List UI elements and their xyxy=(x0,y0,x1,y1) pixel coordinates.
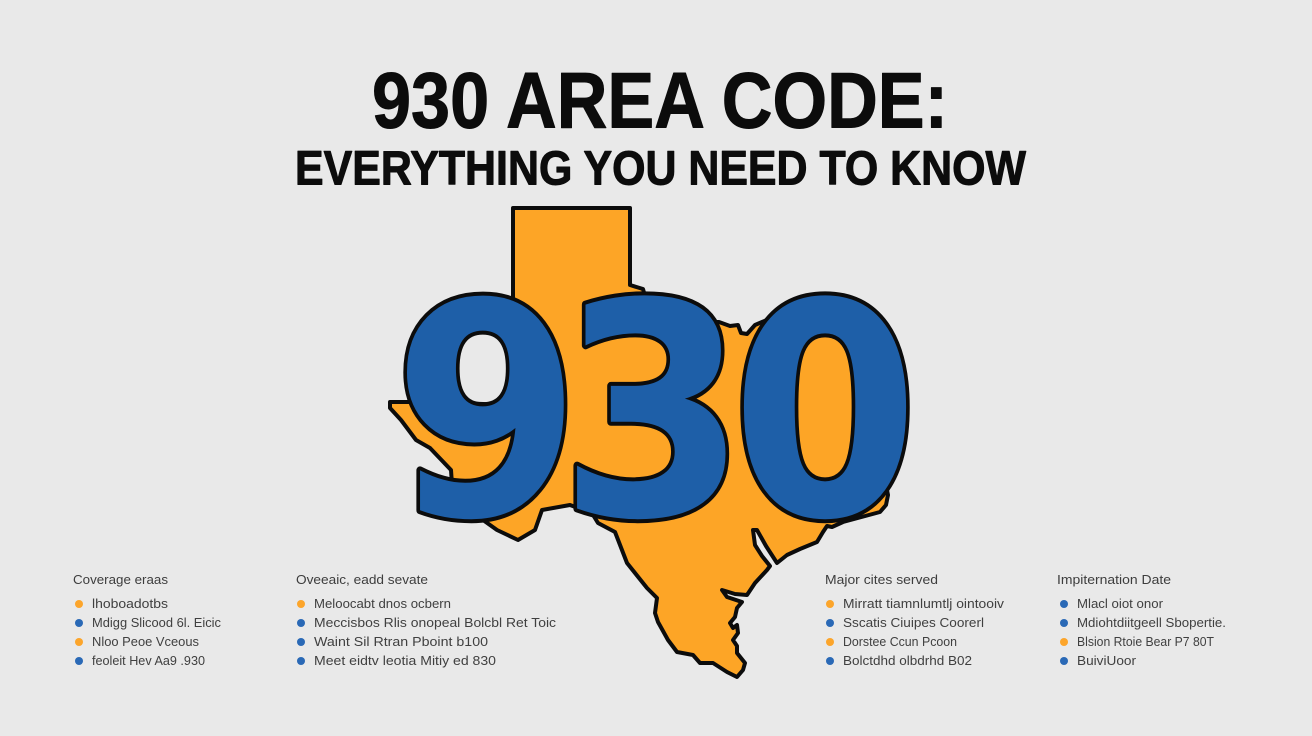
panel: coverage xyxy=(73,572,221,668)
list: overlay: Meccisbos Rlis onopeal Bolcbl Ret Toic xyxy=(314,616,556,630)
list: major cities: Mirratt tiamnlumtlj ointooiv xyxy=(843,597,1005,611)
large 930 numeral: 3 xyxy=(559,240,747,585)
list: implementation date xyxy=(1060,597,1226,668)
list: implementation date: Blsion Rtoie Bear P7 80T xyxy=(1077,635,1214,649)
large 930 numeral xyxy=(393,240,919,585)
list: overlay: Meloocabt dnos ocbern xyxy=(314,597,451,611)
list: major cities: Dorstee Ccun Pcoon xyxy=(843,635,957,649)
list: major cities: Sscatis Ciuipes Coorerl xyxy=(843,616,984,630)
panel: implementation date xyxy=(1057,572,1226,668)
list: overlay: Meet eidtv leotia Mitiy ed 830 xyxy=(314,654,496,668)
heading: implementation date: Impiternation Date xyxy=(1057,572,1171,587)
title xyxy=(295,56,1027,196)
list: major cities: Bolctdhd olbdrhd B02 xyxy=(843,654,972,668)
list: major cities xyxy=(826,597,1005,668)
large 930 numeral: 0 xyxy=(731,240,919,585)
numeral outline: 9 xyxy=(393,240,581,585)
heading line 2: EVERYTHING YOU NEED TO KNOW xyxy=(295,142,1027,196)
heading line 1: 930 AREA CODE: xyxy=(372,56,948,144)
large 930 numeral: 3 xyxy=(559,240,747,585)
heading: coverage: Coverage eraas xyxy=(73,572,169,587)
list: coverage: lhoboadotbs xyxy=(92,597,168,611)
list: overlay xyxy=(297,597,556,668)
panel: major cities xyxy=(825,572,1005,668)
heading: major cities: Major cites served xyxy=(825,572,938,587)
list: coverage: Mdigg Slicood 6l. Eicic xyxy=(92,616,221,630)
Texas map xyxy=(390,208,888,677)
list: implementation date: Mlacl oiot onor xyxy=(1077,597,1163,611)
panel: overlay xyxy=(296,572,556,668)
large 930 numeral: 0 xyxy=(731,240,919,585)
list: coverage xyxy=(75,597,221,668)
list: coverage: Nloo Peoe Vceous xyxy=(92,635,199,649)
numeral fill: 9 xyxy=(393,240,581,585)
list: coverage: feoleit Hev Aa9 .930 xyxy=(92,654,205,668)
list: overlay: Waint Sil Rtran Pboint b100 xyxy=(314,635,488,649)
list: implementation date: BuiviUoor xyxy=(1077,654,1136,668)
list: implementation date: Mdiohtdiitgeell Sbopertie. xyxy=(1077,616,1226,630)
heading: overlay: Oveeaic, eadd sevate xyxy=(296,572,428,587)
